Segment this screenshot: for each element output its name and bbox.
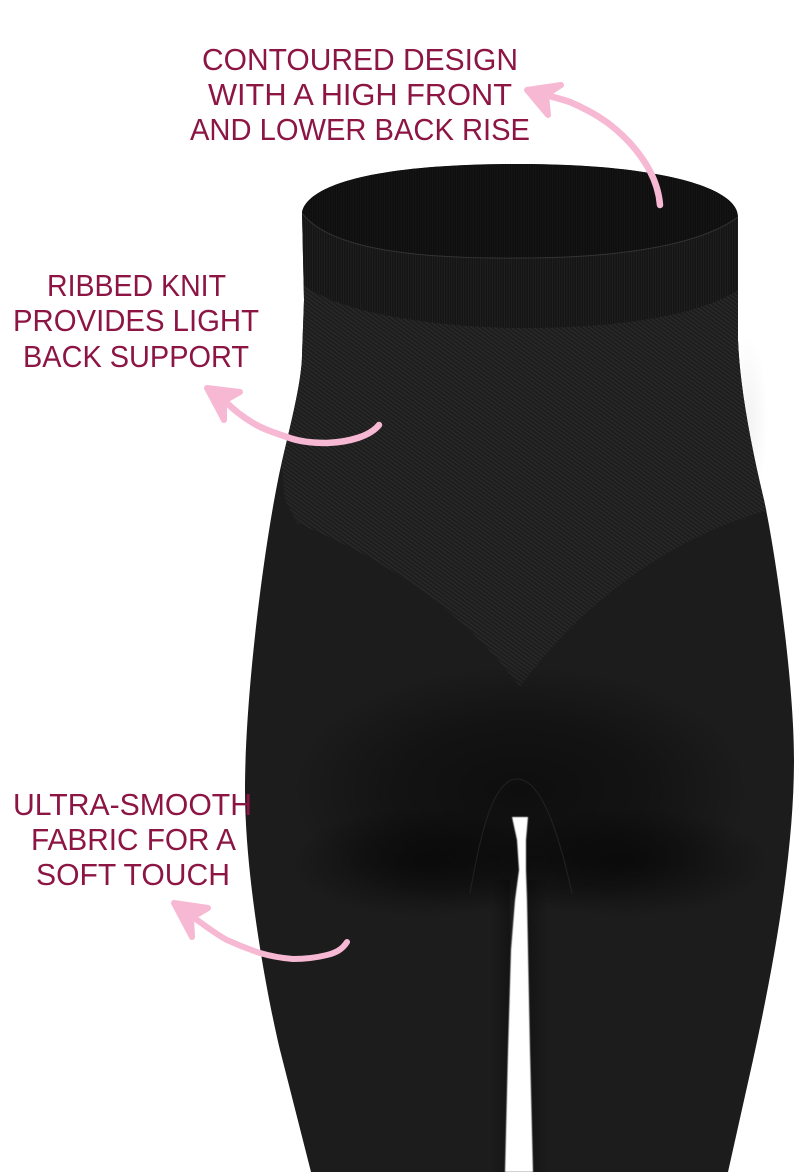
heading: contoured design callout: WITH A HIGH FRONT (208, 77, 512, 112)
right inner-thigh shadow (528, 880, 548, 1172)
text: ribbed knit callout (13, 268, 259, 374)
arrow: pointing from fabric to ultra-smooth text (174, 903, 347, 959)
text: ribbed knit callout: PROVIDES LIGHT (13, 303, 259, 338)
waistband rim highlight (302, 213, 738, 258)
text: ultra-smooth fabric callout: FABRIC FOR A (31, 822, 236, 857)
text: ribbed knit callout: RIBBED KNIT (47, 268, 226, 303)
ribbed waistband (302, 214, 706, 328)
product photo: black high-waist shaping shorts (230, 150, 800, 1172)
central shadow (388, 718, 652, 844)
arrow: pointing from waistband to contoured design text (527, 85, 660, 205)
left glute crease shadow (356, 845, 469, 890)
crotch seam arc (470, 779, 572, 893)
ribbed diagonal knit panel (270, 283, 800, 687)
arrow: pointing from knit panel to ribbed knit text (207, 388, 379, 443)
text: ultra-smooth fabric callout (13, 787, 252, 892)
right glute crease shadow (576, 844, 701, 890)
gap between legs (505, 817, 533, 1172)
heading: contoured design callout: CONTOURED DESIGN (202, 42, 518, 77)
text: ultra-smooth fabric callout: SOFT TOUCH (36, 857, 230, 892)
left inner-thigh shadow (490, 880, 510, 1172)
lower fabric body (230, 150, 800, 1172)
text: ribbed knit callout: BACK SUPPORT (23, 339, 249, 374)
heading: contoured design callout: AND LOWER BACK RISE (190, 112, 530, 147)
text: ultra-smooth fabric callout: ULTRA-SMOOTH (13, 787, 252, 822)
waistband inner back (302, 164, 738, 258)
heading: contoured design callout (190, 42, 530, 147)
faint shadow beside right hip (728, 335, 768, 505)
